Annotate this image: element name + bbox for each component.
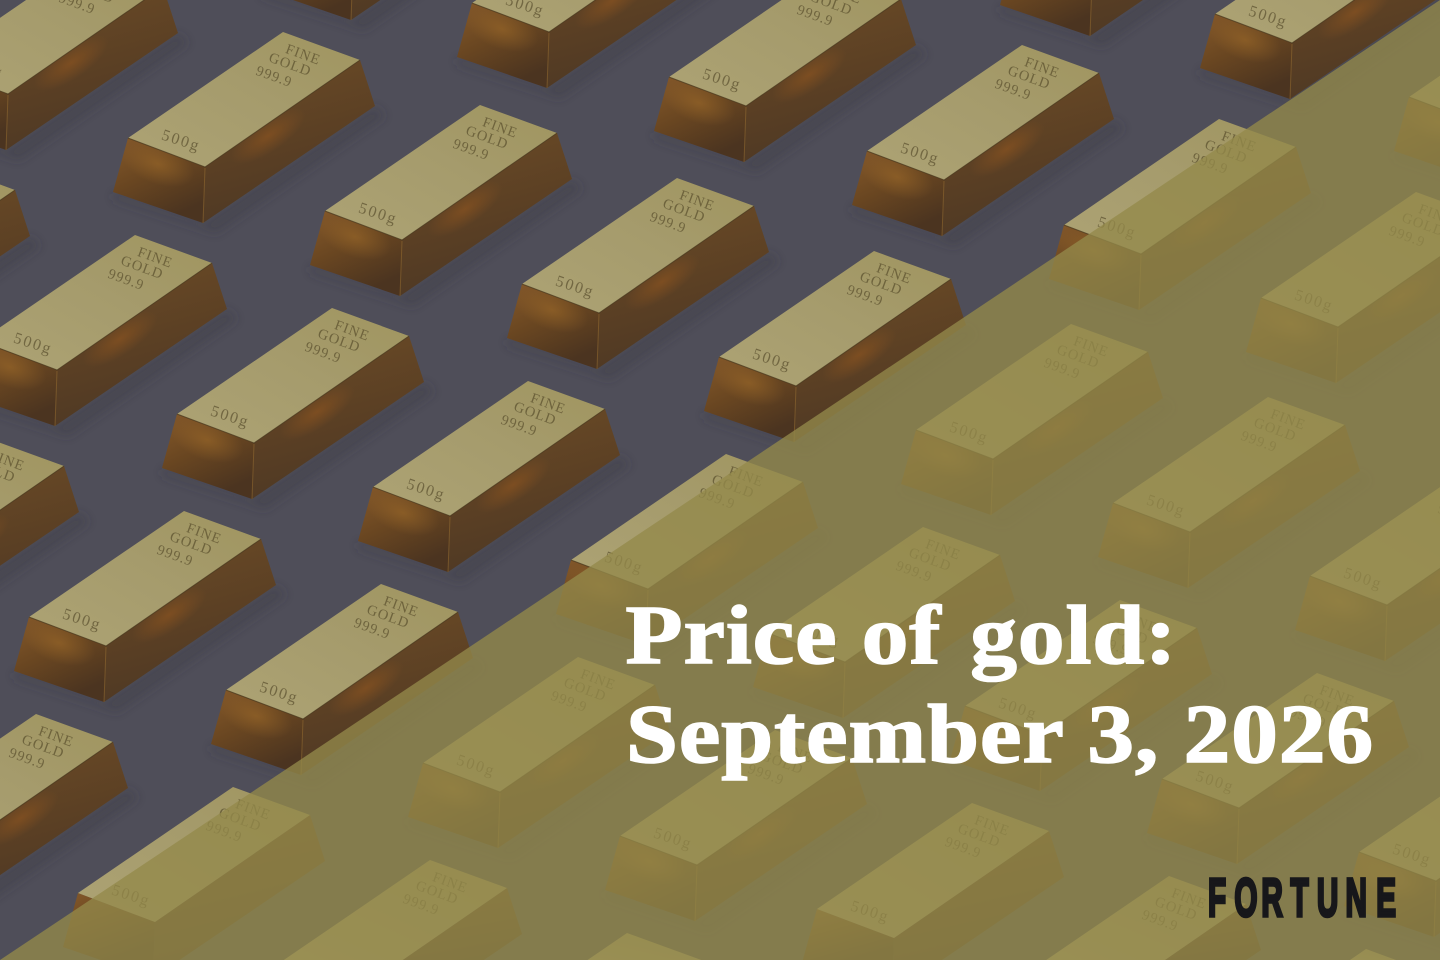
gold bar: FINE <box>381 593 421 621</box>
gold bar cropped by the bottom edge: FINE <box>1169 885 1209 913</box>
gold bar: 500g <box>947 419 991 447</box>
gold bar cropped by the bottom edge <box>1350 949 1396 960</box>
gold bar: GOLD <box>857 269 905 299</box>
gold bar: 999.9 <box>1387 223 1427 251</box>
gold bar <box>1394 0 1440 193</box>
gold bar cropped by the bottom edge: FINE <box>972 812 1012 840</box>
gold bar: FINE <box>184 520 224 548</box>
gold bar: 999.9 <box>648 209 688 237</box>
gold bar cropped by the bottom edge: 500g <box>109 882 153 910</box>
gold bar: GOLD <box>511 399 559 429</box>
gold bar: 999.9 <box>795 2 835 30</box>
gold bar <box>113 32 386 234</box>
gold bar: GOLD <box>906 545 954 575</box>
gold bar cropped by the bottom edge: 500g <box>848 898 892 926</box>
gold bar <box>1098 397 1371 599</box>
gold bar: 999.9 <box>845 282 885 310</box>
gold bar: FINE <box>135 244 175 272</box>
gold bar: 500g <box>1341 565 1385 593</box>
gold bar <box>605 730 878 932</box>
gold bar: 500g <box>700 66 744 94</box>
gold bar: 999.9 <box>155 542 195 570</box>
gold bar: FINE <box>283 41 323 69</box>
gold bar: 500g <box>208 403 252 431</box>
gold bar: GOLD <box>1202 137 1250 167</box>
gold bar: 999.9 <box>1288 704 1328 732</box>
gold bar <box>704 251 977 453</box>
gold bar cropped by the bottom edge: 999.9 <box>204 818 244 846</box>
gold bar: 500g <box>1144 492 1188 520</box>
gold bar: 999.9 <box>1042 355 1082 383</box>
gold bar: 999.9 <box>697 485 737 513</box>
gold bar <box>1344 746 1440 948</box>
gold bar: 500g <box>1095 214 1139 242</box>
gold bar: FINE <box>1268 406 1308 434</box>
gold bar: 500g <box>159 127 203 155</box>
gold bar: GOLD <box>1005 63 1053 93</box>
gold bar: 999.9 <box>549 688 589 716</box>
gold bar cropped by the bottom edge: FINE <box>430 869 470 897</box>
gold bar cropped by the bottom edge <box>588 933 701 960</box>
gold bar: 500g <box>60 606 104 634</box>
gold bar cropped by the bottom edge <box>284 860 522 960</box>
gold bar: 999.9 <box>993 76 1033 104</box>
title: Price of gold: <box>626 589 1177 682</box>
gold bar: 500g <box>898 140 942 168</box>
gold bar <box>0 235 238 437</box>
gold bar: FINE <box>528 390 568 418</box>
gold bar: 500g <box>356 200 400 228</box>
gold bar: 999.9 <box>499 412 539 440</box>
gold bar: FINE <box>1120 609 1160 637</box>
gold bar: FINE <box>874 260 914 288</box>
gold bar: FINE <box>332 317 372 345</box>
gold bar: 500g <box>750 346 794 374</box>
gold bar cropped by the bottom edge: GOLD <box>955 821 1003 851</box>
gold bar: FINE <box>923 536 963 564</box>
gold bar: GOLD <box>1103 618 1151 648</box>
gold bar <box>1049 119 1322 321</box>
gold bar: 999.9 <box>106 266 146 294</box>
gold bar: GOLD <box>364 602 412 632</box>
gold bar cropped by the bottom edge <box>1046 876 1261 960</box>
gold bar <box>1246 192 1440 394</box>
gold bar: GOLD <box>709 472 757 502</box>
gold bar <box>211 584 484 786</box>
gold bar: GOLD <box>463 123 511 153</box>
gold bar: 500g <box>11 330 55 358</box>
gold bar <box>950 600 1223 802</box>
gold bar: 500g <box>1246 3 1290 31</box>
gold bar <box>852 45 1125 247</box>
title <box>626 589 1374 781</box>
gold bar: 500g <box>404 476 448 504</box>
gold bar cropped by the bottom edge: 999.9 <box>401 891 441 919</box>
gold bar: GOLD <box>1300 691 1348 721</box>
gold bar cropped by the bottom edge <box>63 787 325 960</box>
gold bar: GOLD <box>19 732 67 762</box>
gold bar <box>1295 470 1440 672</box>
gold bar: GOLD <box>315 326 363 356</box>
gold bar <box>1000 0 1273 47</box>
gold bar <box>0 714 139 916</box>
gold bar: FINE <box>1022 54 1062 82</box>
gold bar: 999.9 <box>303 339 343 367</box>
gold bar: GOLD <box>561 675 609 705</box>
gold bar <box>310 105 583 307</box>
gold bar: 500g <box>1292 287 1336 315</box>
gold bar: 999.9 <box>1190 150 1230 178</box>
gold bar: 999.9 <box>451 136 491 164</box>
gold bar <box>14 511 287 713</box>
gold bar cropped by the bottom edge: GOLD <box>413 878 461 908</box>
gold bar: 999.9 <box>746 761 786 789</box>
gold bar: 999.9 <box>352 615 392 643</box>
gold bar: GOLD <box>167 529 215 559</box>
gold bar: FINE <box>480 114 520 142</box>
gold bar: GOLD <box>118 253 166 283</box>
gold bar <box>1200 0 1440 110</box>
gold bar: FINE <box>36 723 76 751</box>
gold bar: 999.9 <box>894 558 934 586</box>
gold bar cropped by the bottom edge: GOLD <box>1152 894 1200 924</box>
gold bar: 500g <box>602 549 646 577</box>
gold bar <box>358 381 631 583</box>
gold bar <box>507 178 780 380</box>
gold bar <box>1147 673 1420 875</box>
gold bar: GOLD <box>266 50 314 80</box>
gold bar: GOLD <box>758 748 806 778</box>
gold bar: 500g <box>799 622 843 650</box>
gold bar <box>0 0 189 161</box>
gold bar <box>162 308 435 510</box>
gold bar: FINE <box>578 666 618 694</box>
gold bar <box>753 527 1026 729</box>
gold bar: 999.9 <box>1091 631 1131 659</box>
gold bar cropped by the bottom edge: GOLD <box>216 805 264 835</box>
gold bar: FINE <box>1317 682 1357 710</box>
gold bar: FINE <box>1071 333 1111 361</box>
gold bar: FINE <box>1219 128 1259 156</box>
gold bar: GOLD <box>1054 342 1102 372</box>
gold bar <box>457 0 730 99</box>
gold bar: 500g <box>454 752 498 780</box>
gold bar: 999.9 <box>254 63 294 91</box>
gold bar: 500g <box>651 825 695 853</box>
gold bar cropped by the bottom edge <box>803 803 1064 960</box>
title: September 3, 2026 <box>626 688 1374 781</box>
gold bar: 999.9 <box>7 745 47 773</box>
gold bar cropped by the bottom edge: 999.9 <box>943 834 983 862</box>
gold bar: 500g <box>1193 768 1237 796</box>
logo: FORTUNE wordmark: FORTUNE <box>1208 869 1396 928</box>
gold bar cropped by the bottom edge: FINE <box>233 796 273 824</box>
gold bar <box>0 162 41 364</box>
gold bar: FINE <box>775 739 815 767</box>
gold bar: 500g <box>553 273 597 301</box>
gold bar cropped by the bottom edge: 999.9 <box>1140 907 1180 935</box>
gold bar <box>901 324 1174 526</box>
gold bar <box>261 0 534 31</box>
gold bar: GOLD <box>1251 415 1299 445</box>
gold bar: 500g <box>1390 841 1434 869</box>
gold bar: 999.9 <box>1239 428 1279 456</box>
gold bar <box>408 657 681 859</box>
gold bar <box>654 0 927 173</box>
gold bar: GOLD <box>660 196 708 226</box>
gold bar <box>0 438 90 640</box>
gold bar: 500g <box>996 695 1040 723</box>
gold bar: FINE <box>726 463 766 491</box>
gold bar: 500g <box>257 679 301 707</box>
gold bar <box>556 454 829 656</box>
gold bar: FINE <box>677 187 717 215</box>
